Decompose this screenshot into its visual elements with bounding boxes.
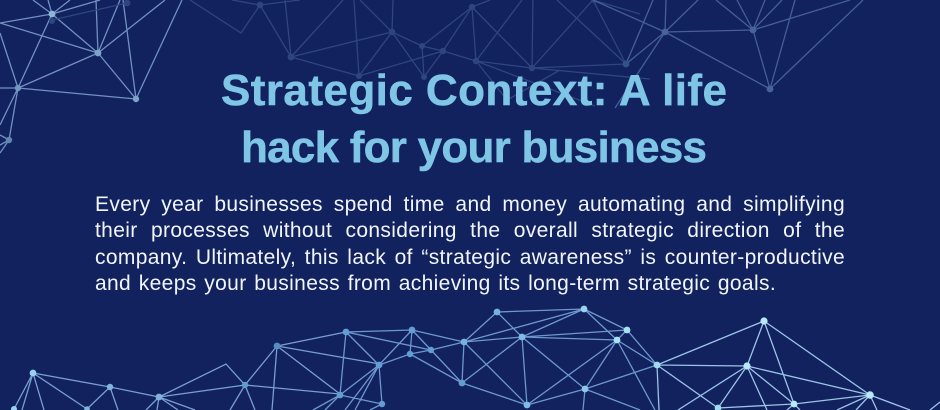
network: top right — [593, 0, 863, 108]
network: bottom left — [11, 332, 380, 410]
body text: their processes without considering the overall strategic direction of the — [95, 219, 845, 242]
network: bottom right — [654, 317, 940, 410]
body text: company. Ultimately, this lack of “strategic awareness” is counter-productive — [95, 246, 845, 269]
body text: and keeps your business from achieving its long-term strategic goals. — [95, 272, 776, 295]
body text: Every year businesses spend time and money automating and simplifying — [95, 193, 845, 216]
title: Strategic Context: A life — [221, 66, 727, 115]
network: top left — [0, 0, 182, 153]
title — [221, 66, 727, 172]
body text — [95, 193, 845, 295]
network: top centre — [49, 0, 650, 106]
title: hack for your business — [241, 123, 707, 172]
network: bottom centre — [313, 306, 657, 410]
